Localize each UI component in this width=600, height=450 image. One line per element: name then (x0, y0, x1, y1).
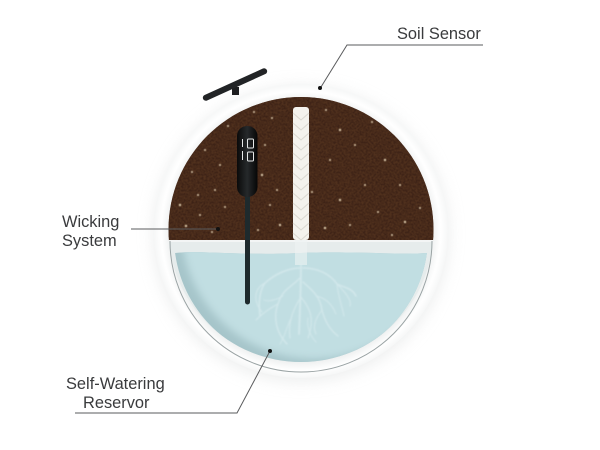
callout: wicking system: System (62, 232, 117, 250)
callout: self-watering reservoir: Reservor (83, 394, 150, 412)
water reservoir (169, 240, 433, 362)
handle (202, 67, 268, 102)
sensor display (242, 139, 254, 161)
inner cross-section (168, 97, 434, 362)
inner wall line (170, 241, 432, 372)
callout: soil sensor (318, 25, 483, 90)
callout: wicking system (62, 213, 220, 250)
callout: self-watering reservoir: Self-Watering (66, 375, 165, 393)
soil sensor probe (237, 126, 258, 304)
callout: wicking system: Wicking (62, 213, 119, 231)
soil (165, 90, 437, 241)
callout: soil sensor: Soil Sensor (397, 25, 481, 43)
planter rim (154, 84, 448, 378)
wick rope (293, 107, 309, 265)
callout: self-watering reservoir (66, 349, 272, 413)
roots (256, 264, 356, 344)
planter (154, 84, 448, 381)
